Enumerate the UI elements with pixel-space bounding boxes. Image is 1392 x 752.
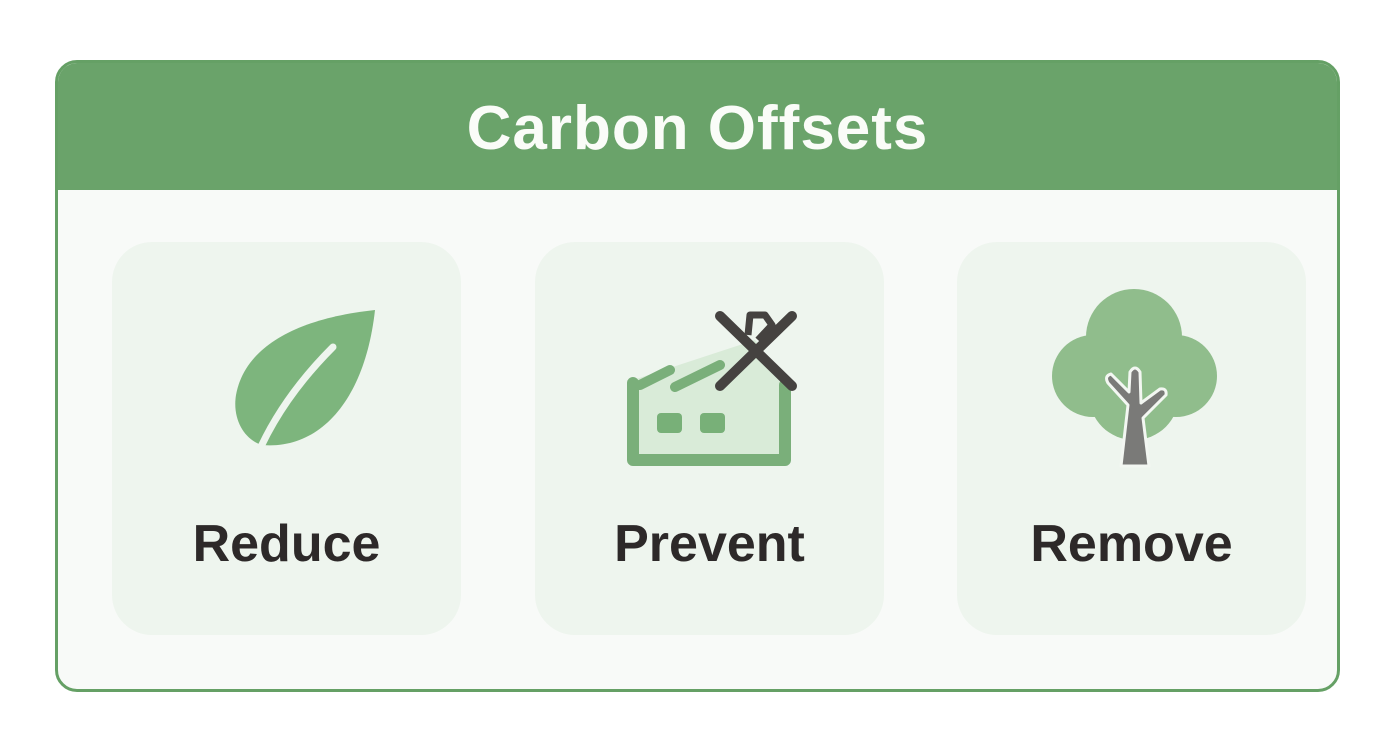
label: reduce: Reduce — [193, 515, 380, 573]
label: prevent: Prevent — [614, 515, 805, 573]
title: Carbon Offsets — [467, 94, 928, 163]
header bar — [58, 63, 1337, 190]
card: reduce — [112, 242, 461, 635]
icon: tree — [1052, 289, 1217, 464]
icon: factory with cross — [627, 311, 797, 466]
card: remove — [957, 242, 1306, 635]
card: prevent — [535, 242, 884, 635]
label: remove: Remove — [1030, 515, 1233, 573]
icon: leaf — [235, 310, 375, 446]
panel: carbon offsets frame — [55, 60, 1340, 692]
